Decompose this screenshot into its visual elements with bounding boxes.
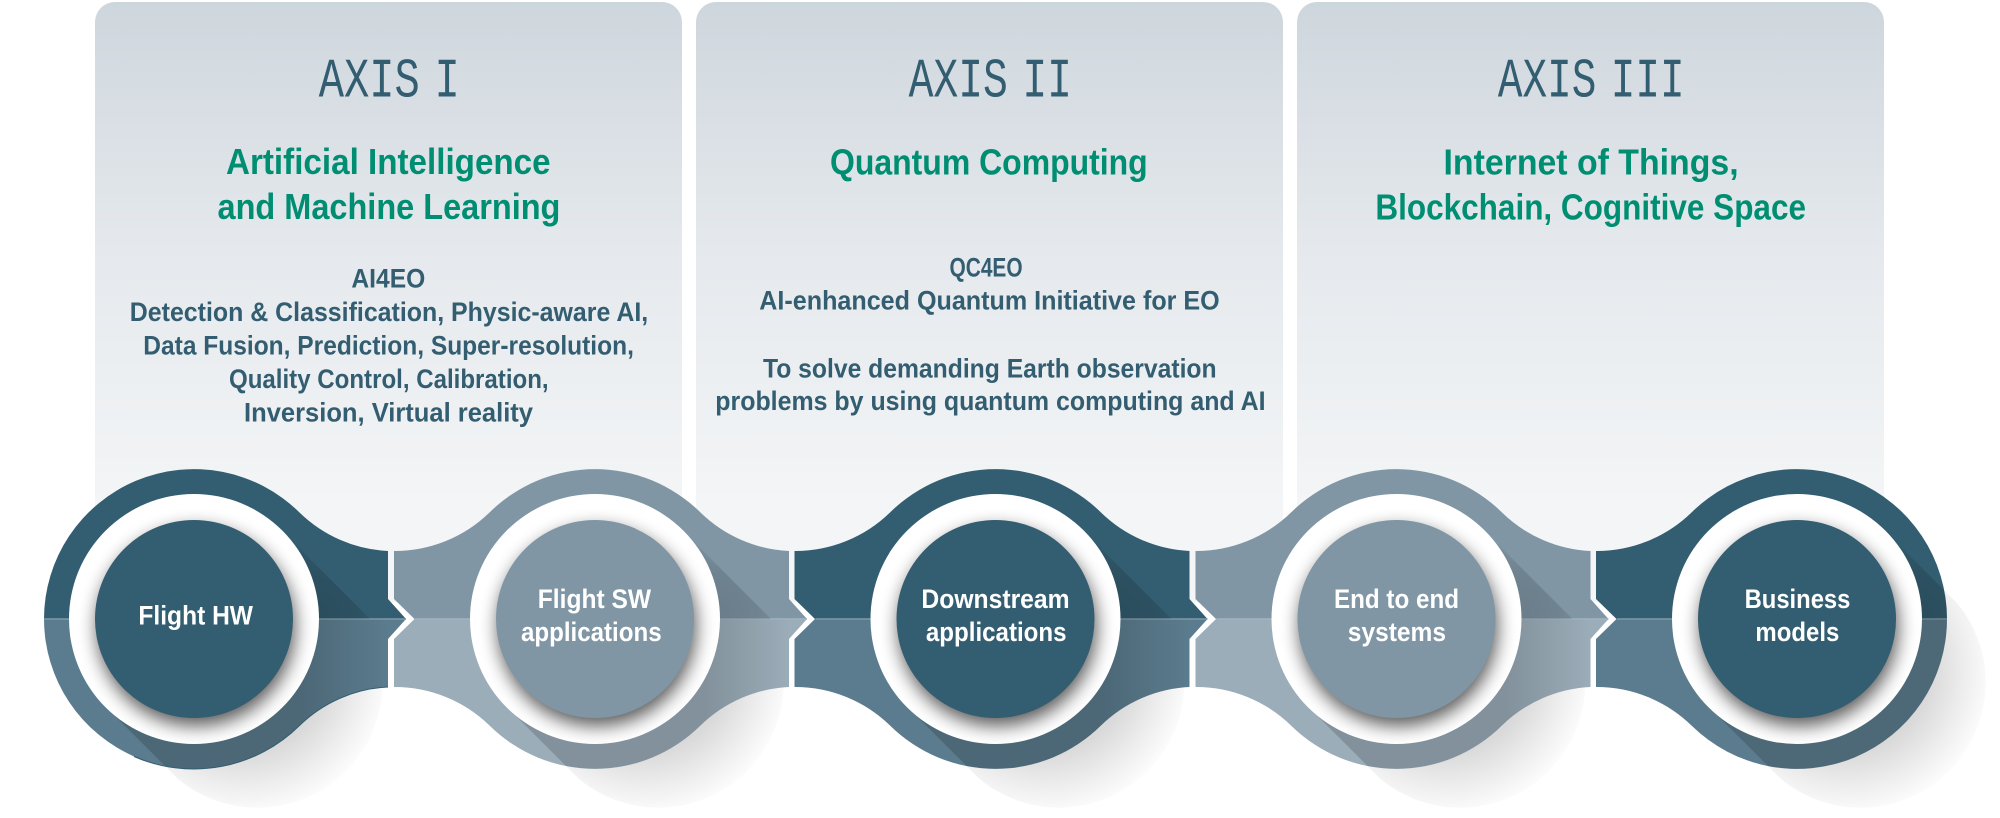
subheading: Artificial Intelligence and Machine Learning <box>218 141 560 227</box>
text block: AI4EO description: Inversion, Virtual reality <box>244 398 533 428</box>
subheading: Artificial Intelligence and Machine Learning: and Machine Learning <box>218 186 560 227</box>
label: End to end systems <box>1334 584 1459 647</box>
label: Flight HW: Flight HW <box>138 600 253 630</box>
node: Downstream applications <box>794 469 1208 769</box>
label: Business models <box>1745 584 1850 647</box>
text block: AI4EO description <box>130 263 648 428</box>
label: End to end systems: systems <box>1348 617 1446 647</box>
subheading: Internet of Things, Blockchain, Cognitive Space: Blockchain, Cognitive Space <box>1375 186 1806 227</box>
label: Flight SW applications: applications <box>521 617 662 647</box>
subheading: Internet of Things, Blockchain, Cognitive Space: Internet of Things, <box>1444 141 1739 182</box>
label: Downstream applications: Downstream <box>921 584 1070 614</box>
panel: Axis II <box>696 2 1283 602</box>
text block: AI4EO description: AI4EO <box>351 263 425 293</box>
label: End to end systems: End to end <box>1334 584 1459 614</box>
soft cast shadows on the white background <box>106 531 1986 808</box>
text block: QC4EO description: QC4EO <box>950 253 1023 283</box>
text block: QC4EO description <box>715 253 1266 416</box>
node: Flight SW applications <box>394 469 807 769</box>
heading: AXIS III: AXIS III <box>1498 50 1685 114</box>
subheading: Artificial Intelligence and Machine Learning: Artificial Intelligence <box>226 141 551 182</box>
label: Downstream applications <box>921 584 1070 647</box>
heading: AXIS I: AXIS I <box>319 50 460 114</box>
label: Business models: models <box>1755 617 1839 647</box>
text block: AI4EO description: Quality Control, Calibration, <box>229 364 549 394</box>
text block: QC4EO description: To solve demanding Earth observation <box>763 353 1217 383</box>
subheading: Internet of Things, Blockchain, Cognitive Space <box>1375 141 1806 227</box>
text block: QC4EO description: AI-enhanced Quantum Initiative for EO <box>759 285 1220 315</box>
heading: AXIS II: AXIS II <box>909 50 1072 114</box>
panel: Axis I <box>95 2 682 602</box>
node: Business models <box>1596 469 1947 769</box>
text block: AI4EO description: Detection & Classification, Physic-aware AI, <box>130 297 648 327</box>
panel: Axis III <box>1297 2 1884 602</box>
label: Downstream applications: applications <box>926 617 1067 647</box>
text block: AI4EO description: Data Fusion, Prediction, Super-resolution, <box>143 330 634 360</box>
subheading: Quantum Computing: Quantum Computing <box>830 141 1148 182</box>
label: Business models: Business <box>1745 584 1850 614</box>
label: Flight SW applications <box>521 584 662 647</box>
label: Flight SW applications: Flight SW <box>538 584 651 614</box>
node: End to end systems <box>1196 469 1608 769</box>
text block: QC4EO description: problems by using quantum computing and AI <box>715 386 1266 416</box>
node: Flight HW <box>44 469 406 770</box>
